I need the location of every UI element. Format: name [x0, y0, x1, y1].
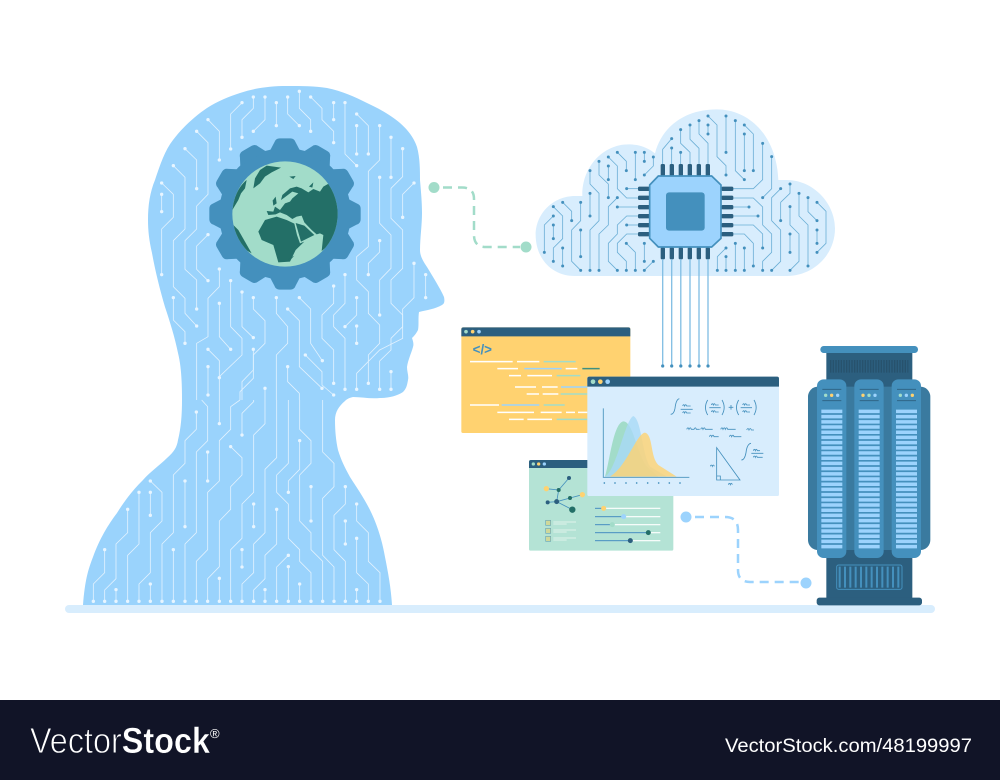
- side block: [808, 387, 930, 550]
- chip body: [650, 176, 721, 247]
- top cap: [820, 346, 918, 353]
- ground line: [65, 605, 935, 613]
- head circuits: upper: [162, 91, 426, 395]
- rack body: [826, 352, 912, 600]
- code window: [461, 327, 630, 433]
- cloud shape: [536, 109, 835, 276]
- network graph: [544, 476, 585, 513]
- gear: [209, 138, 361, 290]
- server column 3: [892, 379, 921, 558]
- code tag icon: </>: [473, 341, 492, 357]
- logo: VectorStock: [30, 720, 211, 761]
- connector: window to server: [680, 512, 812, 588]
- head outline: [83, 86, 444, 605]
- checklist: [546, 520, 576, 541]
- chip data lines: [663, 259, 708, 366]
- head silhouette with circuits: [83, 86, 444, 605]
- head circuits: crossing upper to lower: [197, 269, 299, 400]
- rack base: [817, 598, 922, 605]
- code lines: [470, 362, 600, 419]
- dashboard window: [529, 460, 673, 551]
- head circuits: lower trunks: [185, 400, 334, 601]
- head circuits: lower: [93, 412, 380, 601]
- server column 2: [854, 379, 884, 558]
- chip core: [666, 192, 705, 231]
- chip pins: [638, 164, 733, 259]
- connector: head to cloud: [428, 182, 532, 252]
- top vent: [830, 347, 908, 385]
- bottom grate: [837, 565, 902, 589]
- server rack: [808, 346, 930, 605]
- distribution chart: [603, 408, 689, 484]
- analytics window: [587, 377, 779, 496]
- globe: [232, 161, 340, 267]
- image id: VectorStock.com/48199997: [725, 735, 972, 757]
- sliders: [595, 506, 660, 543]
- icon: gear with globe: [209, 138, 361, 290]
- cloud circuits: top: [608, 121, 772, 270]
- registered mark: ®: [210, 726, 220, 741]
- math formulas: [671, 399, 763, 460]
- server column 1: [817, 379, 846, 558]
- cloud circuits: free: [544, 116, 826, 270]
- triangle diagram: [710, 448, 740, 485]
- footer band: [0, 700, 1000, 780]
- cloud with microchip: [536, 109, 835, 276]
